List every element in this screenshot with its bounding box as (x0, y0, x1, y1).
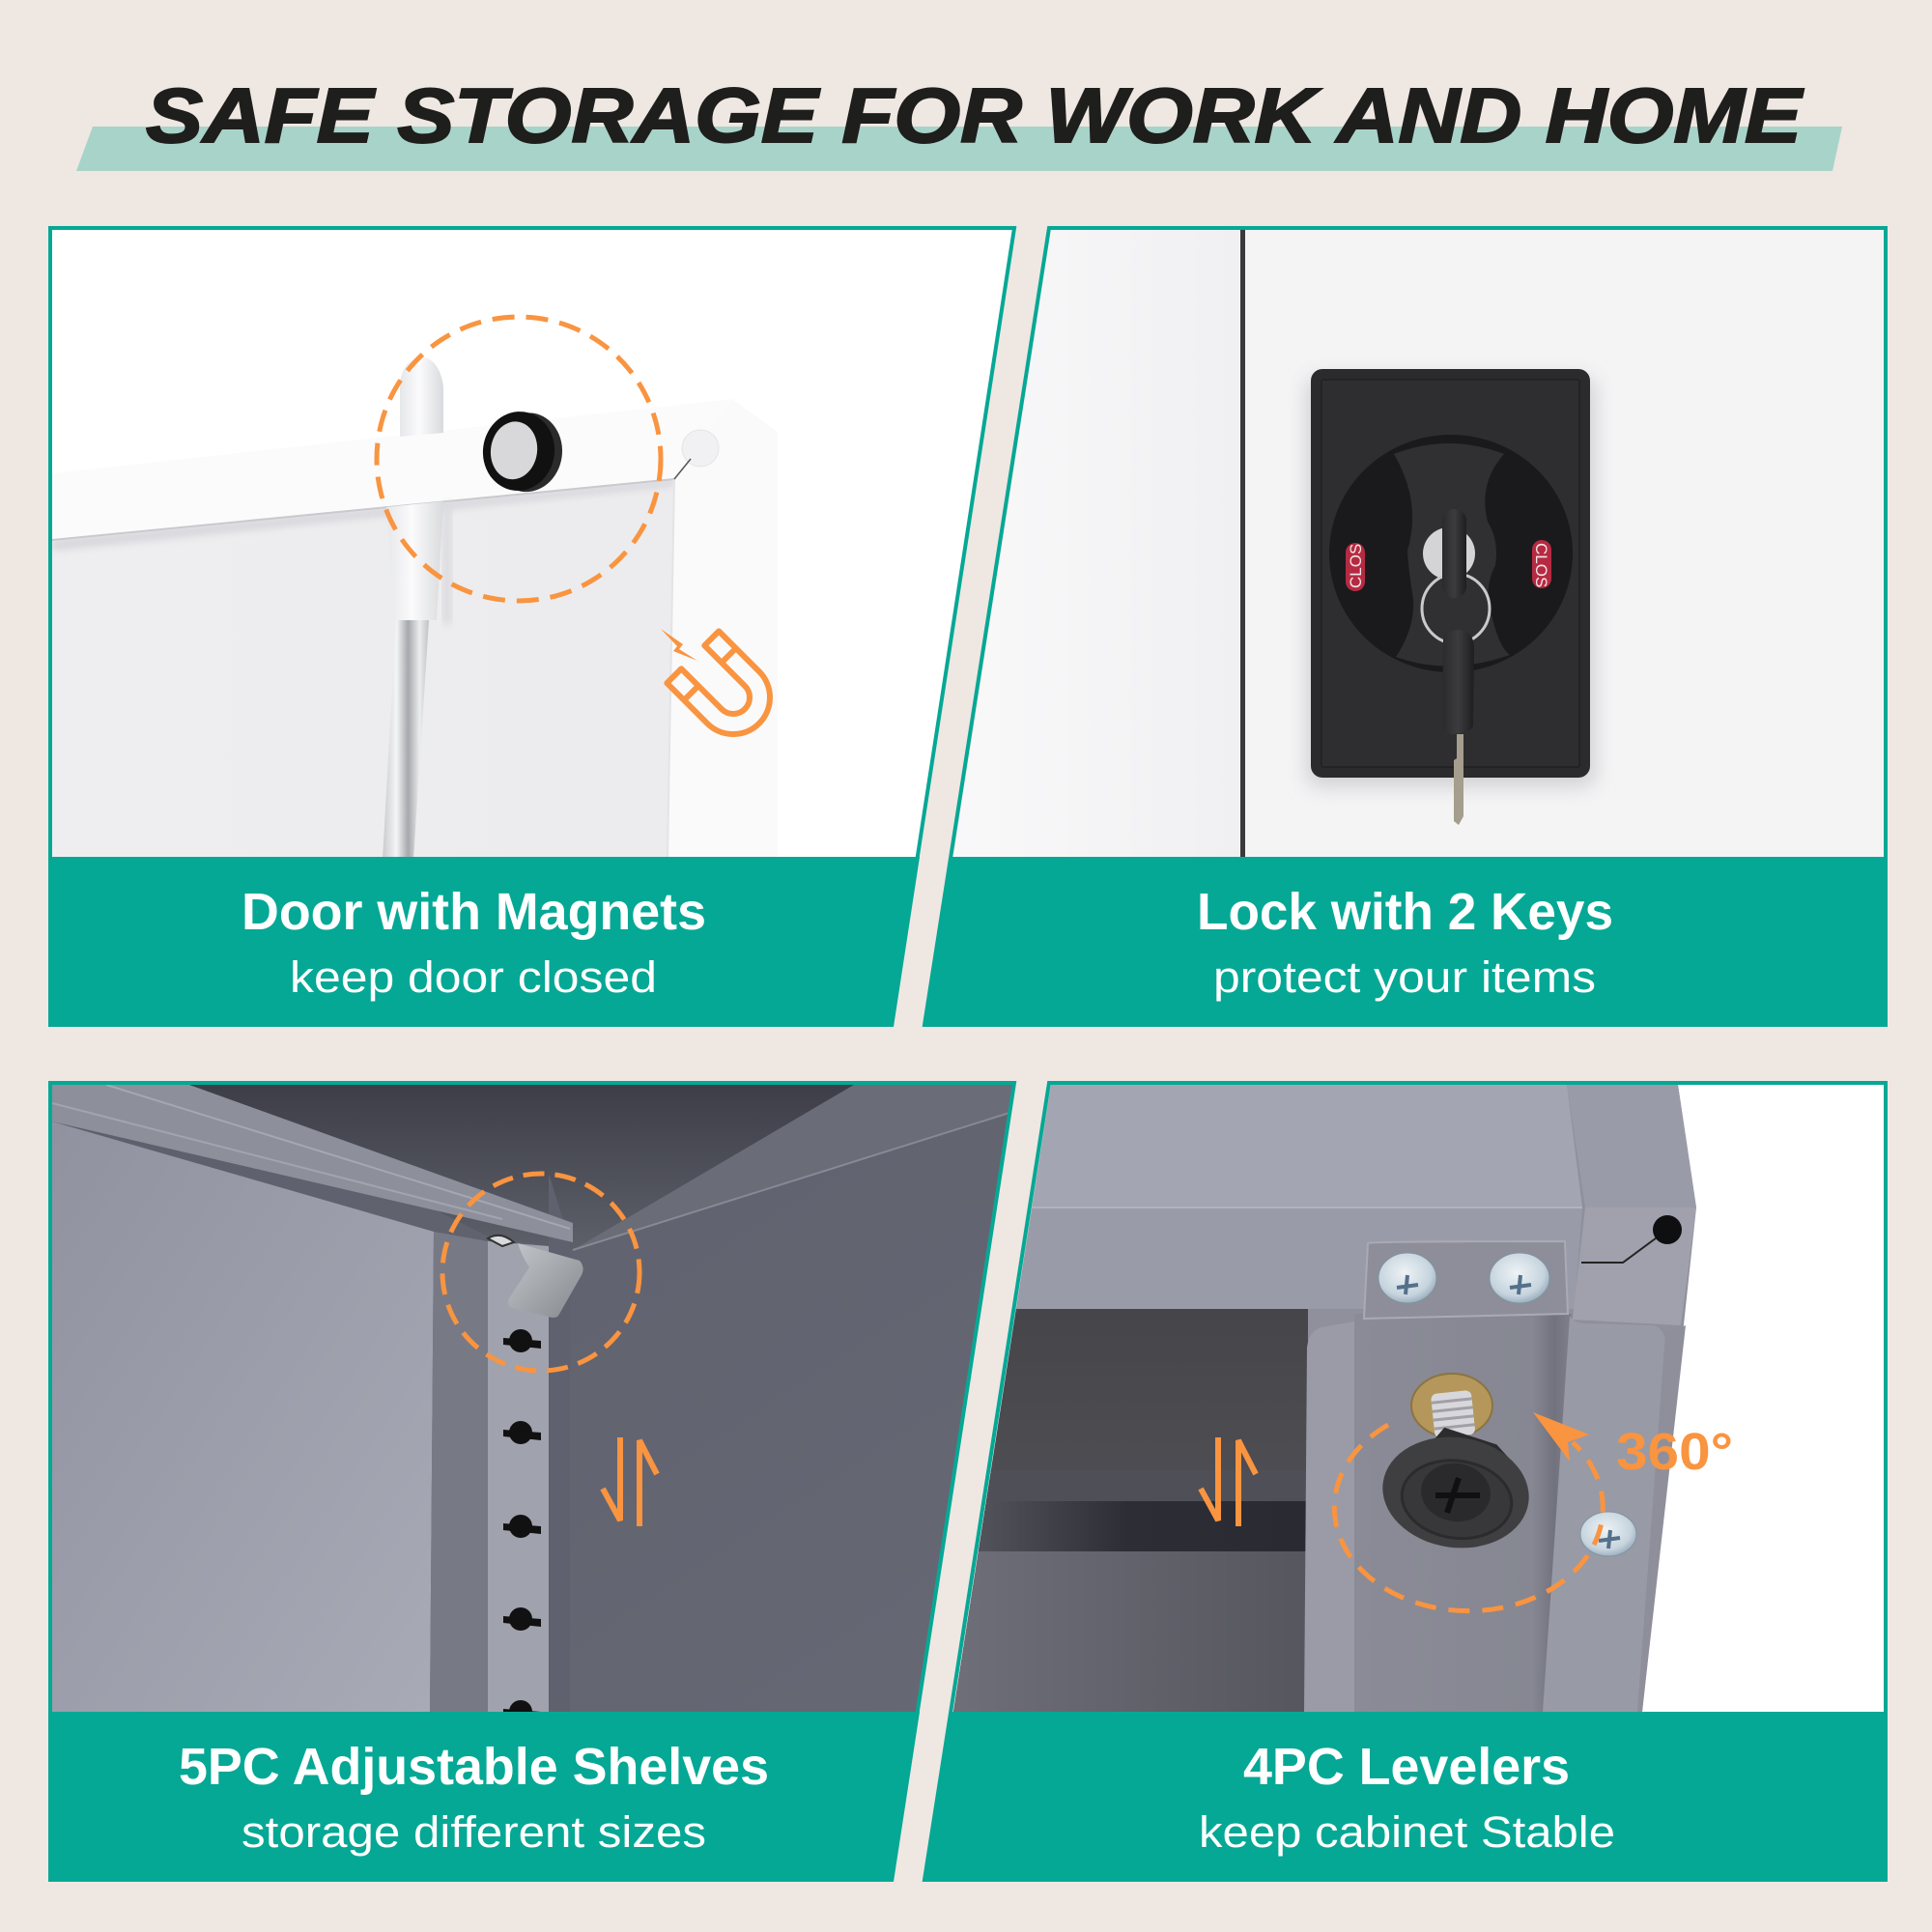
caption: door with magnets: keep door closed (290, 952, 657, 1002)
keyhole slots (503, 1329, 541, 1723)
dashed circle (377, 317, 661, 601)
photo: cabinet corner (947, 1081, 1893, 1719)
rod sleeve (386, 501, 443, 620)
red close labels (1346, 540, 1551, 591)
caption: lock with 2 keys: protect your items (1213, 952, 1596, 1002)
photo: door frame (48, 226, 1024, 864)
caption: adjustable shelves (179, 1738, 769, 1857)
key two (1442, 630, 1474, 734)
caption: door with magnets (242, 883, 706, 1002)
panel: door with magnets (48, 226, 1024, 1027)
icon: up and down arrows (603, 1437, 657, 1526)
shelf clip (488, 1236, 583, 1318)
top front (1030, 1085, 1582, 1208)
caption: door with magnets: Door with Magnets (242, 883, 706, 941)
bracket (1364, 1241, 1568, 1319)
caption bar (923, 857, 1888, 1027)
caption: lock with 2 keys (1197, 883, 1613, 1002)
panel: levelers (923, 1081, 1893, 1882)
corner crack and hole (1581, 1237, 1656, 1264)
caption bar (923, 1712, 1888, 1882)
bolt thread (1431, 1390, 1475, 1438)
caption: adjustable shelves: storage different sizes (242, 1807, 706, 1857)
caption: levelers: keep cabinet Stable (1199, 1807, 1615, 1857)
icon: up and down arrows (1201, 1437, 1256, 1526)
side top (1567, 1085, 1696, 1208)
panel: lock with 2 keys (923, 226, 1893, 1027)
caption bar (48, 1712, 920, 1882)
caption: lock with 2 keys: Lock with 2 Keys (1197, 883, 1613, 941)
panel outline (924, 228, 1886, 1025)
title band (76, 127, 1842, 171)
label: 360 degrees: 360° (1616, 1423, 1733, 1481)
icon: rotation arc (1334, 1412, 1603, 1611)
key ring (1422, 574, 1490, 643)
caption bar (48, 857, 920, 1027)
panel outline (50, 228, 1014, 1025)
rod cap (400, 356, 443, 437)
photo: cabinet doors (947, 226, 1893, 864)
leveler foot (1382, 1428, 1529, 1548)
left flange (1304, 1321, 1354, 1712)
icon: magnet (661, 629, 785, 750)
nub (682, 430, 719, 467)
cabinet interior (947, 1309, 1308, 1713)
caption: levelers: 4PC Levelers (1243, 1738, 1570, 1796)
magnet (483, 412, 562, 493)
photo: cabinet interior (48, 1081, 1024, 1723)
caption: levelers (1199, 1738, 1615, 1857)
red close labels: CLOSE (1532, 543, 1550, 599)
channel (1446, 1314, 1572, 1712)
screws (1378, 1253, 1636, 1556)
key one (1442, 509, 1466, 598)
metal rod (383, 620, 429, 860)
lock core (1423, 527, 1475, 580)
caption: adjustable shelves: 5PC Adjustable Shelves (179, 1738, 769, 1796)
dashed circle (442, 1174, 639, 1371)
lock plate (1311, 369, 1590, 825)
red close labels: CLOSE (1347, 532, 1365, 588)
side strip (1543, 1316, 1665, 1712)
title: SAFE STORAGE FOR WORK AND HOME (146, 72, 1804, 158)
panel: adjustable shelves (48, 1081, 1024, 1882)
panel outline (924, 1083, 1886, 1880)
key blade (1454, 734, 1463, 825)
washer (1411, 1374, 1492, 1437)
panel outline (50, 1083, 1014, 1880)
handle (1394, 443, 1510, 667)
